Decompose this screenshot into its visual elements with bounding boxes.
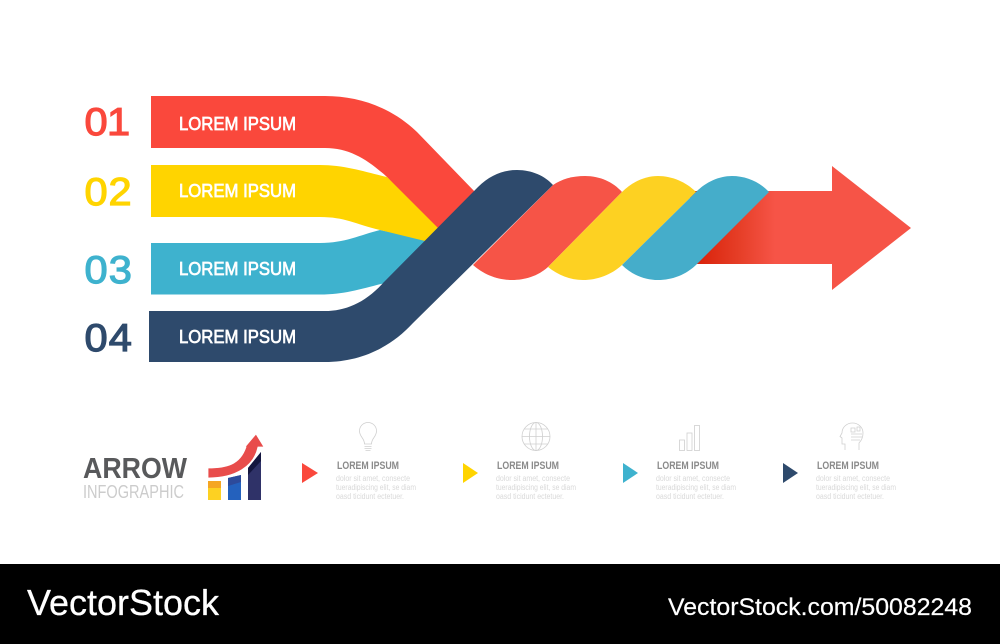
band 04 navy	[149, 170, 553, 362]
item body: oasd ticidunt ectetuer.	[816, 492, 884, 501]
marker triangle yellow	[463, 463, 478, 483]
label 3: LOREM IPSUM	[179, 258, 296, 279]
footer brand: VectorStock	[27, 582, 220, 623]
logo title: ARROW	[83, 453, 188, 485]
twist yellow	[548, 176, 696, 280]
band labels	[179, 113, 296, 347]
label 4: LOREM IPSUM	[179, 326, 296, 347]
number 04: 04	[84, 317, 132, 360]
item body: tueradipiscing elit, se diam	[496, 483, 576, 492]
marker triangle navy	[783, 463, 798, 483]
footer url: VectorStock.com/50082248	[668, 594, 972, 621]
marker triangle red	[302, 463, 318, 483]
marker triangle blue	[623, 463, 638, 483]
logo subtitle: INFOGRAPHIC	[83, 482, 184, 502]
item body: dolor sit amet, consecte	[336, 474, 410, 483]
item body: tueradipiscing elit, se diam	[816, 483, 896, 492]
number 03: 03	[84, 249, 132, 292]
footer bar	[0, 564, 1000, 644]
item heading: LOREM IPSUM	[497, 460, 559, 472]
icon: globe	[522, 422, 550, 450]
icon: head with chart	[840, 423, 863, 450]
main twisted arrow diagram	[149, 96, 911, 362]
item body: dolor sit amet, consecte	[816, 474, 890, 483]
item body	[336, 474, 416, 501]
icon: light bulb	[360, 422, 376, 450]
logo rising arrow	[208, 434, 264, 478]
item heading: LOREM IPSUM	[657, 460, 719, 472]
item body: oasd ticidunt ectetuer.	[656, 492, 724, 501]
item body: oasd ticidunt ectetuer.	[496, 492, 564, 501]
label 2: LOREM IPSUM	[179, 180, 296, 201]
item body: dolor sit amet, consecte	[496, 474, 570, 483]
arrow shaded shaft	[690, 191, 776, 264]
item body: oasd ticidunt ectetuer.	[336, 492, 404, 501]
icon: bars	[680, 426, 700, 450]
item body	[816, 474, 896, 501]
band 01 red	[151, 96, 476, 232]
number 02: 02	[84, 171, 132, 214]
footnote item 4	[783, 423, 896, 501]
number 01: 01	[84, 101, 130, 144]
logo bar chart	[208, 452, 261, 500]
band 02 yellow	[151, 165, 442, 241]
step numbers	[84, 101, 132, 360]
item body	[496, 474, 576, 501]
label 1: LOREM IPSUM	[179, 113, 296, 134]
footnote item 1	[302, 422, 416, 501]
footnote item 2	[463, 422, 576, 501]
item heading: LOREM IPSUM	[337, 460, 399, 472]
item heading: LOREM IPSUM	[817, 460, 879, 472]
item body: tueradipiscing elit, se diam	[336, 483, 416, 492]
arrow output	[690, 166, 911, 290]
twist blue	[622, 176, 769, 280]
band 03 blue	[151, 230, 430, 294]
footnote item 3	[623, 426, 736, 501]
item body: tueradipiscing elit, se diam	[656, 483, 736, 492]
item body	[656, 474, 736, 501]
item body: dolor sit amet, consecte	[656, 474, 730, 483]
logo block	[83, 434, 264, 502]
twist red	[473, 176, 622, 280]
